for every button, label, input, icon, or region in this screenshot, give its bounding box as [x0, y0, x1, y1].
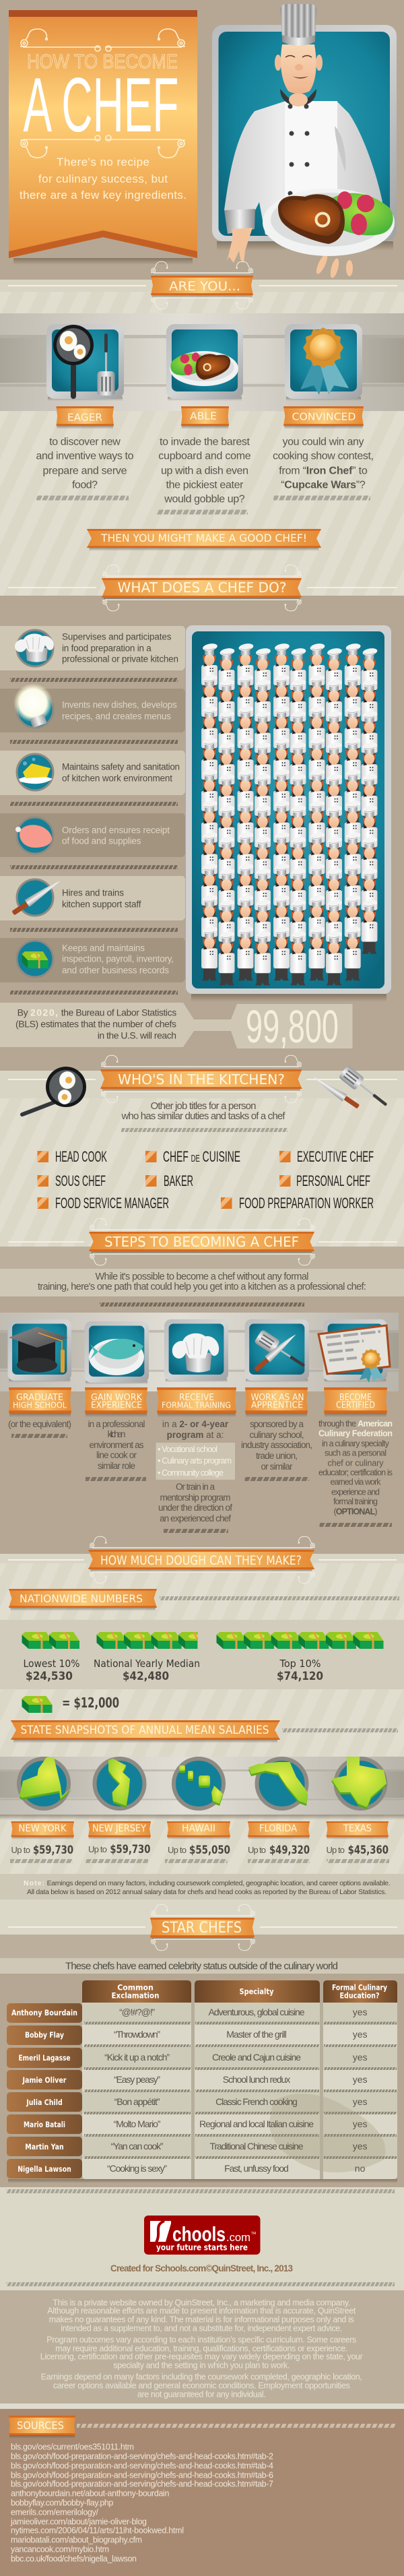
icon: light bulb	[13, 683, 53, 728]
step: become certified: (OPTIONAL)	[334, 1507, 377, 1516]
step: become certified: Culinary Federation	[318, 1428, 393, 1438]
text: eager description: food?	[72, 480, 98, 491]
state: hawaii: Up to	[168, 1845, 187, 1855]
text: disclaimer: are not guaranteed for any individual.	[137, 2389, 266, 2399]
row: supervises: in food preparation in a	[62, 643, 152, 654]
state: florida: Up to	[248, 1845, 266, 1855]
row: safety	[0, 751, 185, 795]
step: graduate high school: HIGH SCHOOL	[13, 1400, 67, 1410]
state: new york: Up to	[11, 1845, 30, 1855]
panel: convinced: CONVINCED	[292, 411, 356, 423]
column: specialty: Master of the grill	[226, 2029, 287, 2040]
text: convinced description	[273, 437, 374, 491]
text: disclaimer: career options available and general economic conditions. Employment opportunities	[53, 2381, 350, 2391]
column: formal culinary education: yes	[353, 2052, 367, 2063]
heading: steps to becoming a chef: STEPS TO BECOMING A CHEF	[104, 1234, 299, 1250]
logo: schools.com: your future starts here	[156, 2242, 248, 2252]
panel: able	[157, 324, 251, 515]
column: formal culinary education: yes	[353, 2141, 367, 2151]
step: receive formal training: an experienced chef	[160, 1513, 231, 1523]
step: gain work experience: kitchen	[108, 1429, 125, 1439]
icon: steak plate	[166, 324, 243, 401]
row: records: and other business records	[62, 966, 169, 976]
row labels: chef names: Nigella Lawson	[18, 2164, 71, 2174]
table header: Common	[117, 1982, 154, 1992]
text: able description: would gobble up?	[164, 494, 245, 505]
heading: how much dough can they make: HOW MUCH DOUGH CAN THEY MAKE?	[100, 1553, 302, 1568]
column: formal culinary education: yes	[353, 2074, 367, 2085]
chart: top 10 percent: Top 10%	[279, 1658, 321, 1670]
chart: lowest 10 percent: $24,530	[26, 1670, 73, 1683]
step: become certified: through the American	[318, 1419, 393, 1428]
state: florida: $49,320	[269, 1844, 310, 1857]
step: work as an apprentice: industry association,	[241, 1440, 312, 1450]
row: records: inspection, payroll, inventory,	[62, 954, 174, 964]
state: new jersey: $59,730	[110, 1843, 151, 1856]
step: work as an apprentice	[241, 1319, 312, 1481]
icon: raw chicken	[15, 817, 53, 854]
ornament: title top flourish	[20, 29, 185, 51]
step: receive formal training: RECEIVE	[179, 1393, 214, 1403]
ornament: title bottom flourish	[20, 135, 185, 158]
subheading: nationwide numbers	[9, 1589, 157, 1611]
column: formal culinary education: yes	[353, 2096, 367, 2107]
list: sources: anthonybourdain.net/about-anthony-bourdain	[11, 2489, 169, 2499]
heading: who's in the kitchen: WHO'S IN THE KITCHEN?	[118, 1071, 285, 1088]
text: disclaimer: Program outcomes vary according to each institution’s specific curriculum. Some careers	[46, 2335, 356, 2345]
intro text: there are a few key ingredients.	[20, 189, 187, 201]
text: star chefs intro: These chefs have earned celebrity status outside of the culinary world	[65, 1961, 338, 1972]
text: eager description: and inventive ways to	[36, 451, 134, 462]
row: supervises: Supervises and participates	[62, 632, 172, 642]
icon: knife	[10, 877, 63, 916]
chart: lowest 10 percent	[22, 1632, 79, 1683]
step: become certified: in a culinary specialty	[322, 1439, 390, 1449]
column: specialty: Creole and Cajun cuisine	[212, 2052, 301, 2063]
text: disclaimer: intended as a supplement to, and not a substitute for, independent expert advice.	[61, 2323, 342, 2333]
column: common exclamation: “Throwdown”	[114, 2029, 160, 2040]
state: texas: $45,360	[348, 1844, 389, 1857]
list: sources: bls.gov/ooh/food-preparation-and-serving/chefs-and-head-cooks.htm#tab-4	[11, 2461, 273, 2470]
icon: spatula and knife crossed	[245, 1319, 309, 1382]
callout: 99,800 chefs by 2020: 99,800	[246, 1001, 339, 1053]
step: work as an apprentice: or similar	[261, 1462, 293, 1472]
heading: what does a chef do: WHAT DOES A CHEF DO?	[117, 579, 287, 596]
text: able description: the pickiest eater	[166, 480, 244, 491]
step: become certified: chef or culinary	[327, 1458, 384, 1468]
state: florida	[248, 1759, 310, 1863]
text: disclaimer: specialty and the setting in which you plan to work.	[113, 2361, 290, 2370]
heading: star chefs	[8, 1904, 397, 1951]
column: specialty: Adventurous, global cuisine	[209, 2007, 305, 2017]
column: formal culinary education: yes	[353, 2029, 367, 2040]
step: become certified: earned via work	[330, 1477, 381, 1486]
row: invents: recipes, and creates menus	[62, 712, 171, 722]
legend: one stack equals 12,000: = $12,000	[62, 1695, 119, 1711]
row: orders	[0, 813, 185, 857]
row: safety: of kitchen work environment	[62, 774, 172, 784]
step: become certified: such as a personal	[325, 1449, 386, 1458]
column: common exclamation: “Bon appétit”	[114, 2096, 160, 2107]
step: graduate high school: GRADUATE	[16, 1393, 63, 1403]
state: hawaii: HAWAII	[182, 1823, 215, 1834]
step: gain work experience: in a professional	[88, 1419, 145, 1429]
step: gain work experience: line cook or	[96, 1450, 137, 1460]
list: sources: nytimes.com/2006/04/11/arts/11iht-bookwed.html	[11, 2525, 184, 2535]
step: receive formal training: program at a:	[167, 1430, 224, 1440]
icon: texas map	[331, 1757, 386, 1809]
subheading: sources	[9, 2416, 75, 2439]
column: formal culinary education: no	[355, 2163, 366, 2174]
step: graduate high school: (or the equivalent)	[8, 1419, 71, 1429]
icon: new york map	[19, 1757, 72, 1809]
banner: then you might make a good chef	[87, 529, 321, 551]
step: become certified: formal training	[333, 1497, 378, 1507]
column: common exclamation: “Cooking is sexy”	[107, 2163, 167, 2174]
list: school types: • Vocational school	[158, 1445, 217, 1454]
panel: convinced	[273, 324, 374, 500]
row: supervises: professional or private kitchen	[62, 654, 178, 664]
list: job titles: FOOD SERVICE MANAGER	[55, 1195, 169, 1212]
state: texas	[326, 1757, 389, 1863]
row: hires: kitchen support staff	[62, 900, 141, 910]
table header: Exclamation	[112, 1990, 159, 2000]
step: become certified	[318, 1319, 393, 1527]
heading: are you: ARE YOU...	[169, 279, 240, 294]
row: orders: Orders and ensures receipt	[62, 825, 170, 836]
intro text	[20, 156, 187, 201]
credit line: Created for Schools.com©QuinStreet, Inc., 2013	[110, 2263, 293, 2273]
chart: national median	[94, 1632, 199, 1682]
text: eager description: prepare and serve	[43, 466, 127, 477]
note: salary data: All data below is based on 2012 annual salary data for chefs and head cooks as reported by the Bureau of Labor Statistics.	[27, 1888, 386, 1896]
subheading: nationwide numbers: NATIONWIDE NUMBERS	[20, 1592, 143, 1605]
callout: 99,800 chefs by 2020: 2020,	[30, 1007, 58, 1018]
text: other job titles intro: Other job titles for a person	[151, 1100, 256, 1112]
row: orders: of food and supplies	[62, 836, 141, 846]
list: sources: yancancook.com/mybio.htm	[11, 2544, 109, 2554]
row: supervises	[0, 626, 185, 670]
text: steps intro: While it's possible to become a chef without any formal	[96, 1271, 308, 1282]
state: texas: Up to	[326, 1845, 345, 1855]
row labels: chef names: Emeril Lagasse	[19, 2053, 71, 2063]
text: disclaimer	[40, 2298, 363, 2399]
column: common exclamation: “Molto Mario”	[114, 2118, 161, 2129]
callout: 99,800 chefs by 2020: By	[18, 1007, 28, 1018]
list: job titles: SOUS CHEF	[55, 1172, 106, 1189]
intro text: for culinary success, but	[38, 172, 168, 185]
text: able description: up with a dish even	[161, 466, 248, 477]
text: convinced description: from “Iron Chef” to	[279, 466, 368, 477]
step: gain work experience: similar role	[98, 1461, 135, 1471]
text: able description: cupboard and come	[158, 451, 251, 462]
logo: schools.com: TM	[251, 2232, 256, 2236]
step: become certified: experience and	[331, 1488, 380, 1497]
list: school types	[156, 1443, 235, 1480]
step: receive formal training: under the direction of	[158, 1503, 232, 1513]
panel: able: ABLE	[190, 410, 217, 422]
text: steps intro	[38, 1271, 366, 1292]
list: sources: bobbyflay.com/bobby-flay.php	[11, 2499, 113, 2508]
step: gain work experience: GAIN WORK	[91, 1393, 142, 1403]
icon: new jersey map	[94, 1759, 144, 1809]
step: graduate high school	[8, 1319, 71, 1438]
chart: top 10 percent: $74,120	[277, 1670, 323, 1683]
intro text: There's no recipe	[57, 156, 149, 168]
heading: are you	[8, 261, 397, 309]
illustration: chef holding a plate	[212, 4, 397, 279]
step: work as an apprentice: sponsored by a	[250, 1419, 304, 1429]
table header	[82, 1980, 397, 2003]
logo: schools.com: chools	[172, 2222, 226, 2246]
note: salary data	[24, 1879, 391, 1896]
column: common exclamation: “Easy peasy”	[114, 2074, 160, 2085]
chart: pictogram of 99 chefs	[186, 625, 391, 1002]
icon: hawaii map	[174, 1759, 224, 1809]
heading: who's in the kitchen	[8, 1055, 397, 1103]
panel: eager: EAGER	[67, 411, 102, 423]
text: able description: to invade the barest	[160, 437, 250, 448]
column: formal culinary education	[353, 2007, 367, 2174]
column: specialty: Traditional Chinese cuisine	[210, 2141, 304, 2151]
callout: 99,800 chefs by 2020: in the U.S. will reach	[98, 1030, 176, 1041]
text: steps intro: training, here's one path that could help you get into a kitchen as a professional chef:	[38, 1282, 366, 1292]
row labels: chef names: Mario Batali	[24, 2120, 65, 2129]
step: receive formal training: Or train in a	[176, 1482, 215, 1492]
panel: title ribbon	[9, 10, 197, 265]
text: disclaimer: Licensing, certification and other pre-requisites may vary widely depending on the state, your	[40, 2352, 363, 2361]
table header: Specialty	[240, 1986, 274, 1996]
icon: toque	[15, 630, 54, 666]
text: convinced description: cooking show contest,	[273, 451, 374, 462]
row: safety: Maintains safety and sanitation	[62, 762, 180, 772]
chart: national median: $42,480	[123, 1670, 169, 1683]
list: sources: bls.gov/ooh/food-preparation-and-serving/chefs-and-head-cooks.htm#tab-7	[11, 2480, 273, 2489]
row: records	[0, 938, 185, 982]
icon: spatula and knife	[311, 1065, 391, 1111]
column: specialty	[199, 2007, 314, 2174]
subheading: sources: SOURCES	[17, 2419, 64, 2432]
heading: what does a chef do	[8, 565, 397, 611]
row: hires: Hires and trains	[62, 888, 124, 898]
text: disclaimer: may require additional education, training, qualifications, certifications or experience.	[55, 2344, 347, 2353]
table: star chefs	[7, 1980, 397, 2183]
logo: schools.com	[144, 2216, 260, 2255]
chart: lowest 10 percent: Lowest 10%	[23, 1658, 79, 1670]
state: hawaii: $55,050	[189, 1844, 230, 1857]
text: other job titles intro: who has similar duties and tasks of a chef	[121, 1110, 285, 1122]
icon: florida map	[248, 1759, 308, 1809]
icon: fish on a plate	[85, 1321, 149, 1384]
step: gain work experience: EXPERIENCE	[91, 1400, 142, 1411]
column: specialty: Regional and local Italian cuisine	[199, 2118, 314, 2129]
row labels: chef names: Anthony Bourdain	[11, 2008, 77, 2017]
step: receive formal training	[156, 1319, 236, 1533]
list: job titles: CHEF DE CUISINE	[163, 1148, 240, 1165]
text: other job titles intro	[121, 1100, 285, 1122]
icon: certificate	[318, 1319, 390, 1383]
row labels: chef names: Jamie Oliver	[22, 2075, 67, 2085]
text: disclaimer: This is a private website owned by QuinStreet, Inc., a marketing and media company.	[53, 2298, 350, 2307]
logo: schools.com: .com	[226, 2231, 250, 2244]
list: sources	[10, 2442, 273, 2563]
callout: 99,800 chefs by 2020	[0, 1001, 353, 1053]
table header: Formal Culinary	[332, 1982, 387, 1992]
step: work as an apprentice: APPRENTICE	[251, 1400, 303, 1411]
column: formal culinary education: yes	[353, 2007, 367, 2017]
row labels: chef names: Julia Child	[26, 2098, 63, 2107]
text: convinced description: “Cupcake Wars”?	[281, 480, 366, 491]
text: disclaimer: Although reasonable efforts are made to present information that is accurate, QuinStreet	[47, 2306, 356, 2315]
list: sources: bls.gov/ooh/food-preparation-and-serving/chefs-and-head-cooks.htm#tab-6	[11, 2470, 273, 2480]
heading: star chefs: STAR CHEFS	[162, 1920, 242, 1937]
icon: cash stack	[17, 941, 53, 977]
row: invents: Invents new dishes, develops	[62, 700, 177, 710]
state: hawaii	[165, 1759, 230, 1863]
step: receive formal training: mentorship program	[160, 1493, 230, 1503]
step: become certified: educator; certification is	[318, 1468, 393, 1477]
row: hires	[0, 876, 185, 920]
list: sources: emerils.com/emerilology/	[11, 2508, 99, 2517]
row: invents	[0, 683, 185, 732]
state: new york: NEW YORK	[19, 1823, 67, 1834]
callout: 99,800 chefs by 2020: the Bureau of Labor Statistics	[61, 1007, 176, 1018]
column: common exclamation: “@!#?@!”	[119, 2007, 155, 2017]
note: salary data: Note:	[24, 1879, 44, 1887]
text: disclaimer: makes no guarantees of any kind. The material is for informational purposes only and is	[49, 2315, 354, 2325]
text: able description	[158, 437, 251, 505]
column: common exclamation: “Yan can cook”	[111, 2141, 164, 2151]
column: common exclamation	[104, 2007, 170, 2174]
column: specialty: Fast, unfussy food	[224, 2163, 289, 2174]
row labels: chef names: Martin Yan	[25, 2142, 64, 2151]
subheading: state snapshots	[11, 1720, 280, 1743]
heading: how much dough can they make	[8, 1536, 397, 1583]
step: work as an apprentice: trade union,	[256, 1451, 298, 1461]
legend: one stack equals 12,000	[22, 1695, 119, 1713]
title line 1: HOW TO BECOME	[27, 51, 178, 73]
step: become certified: CERTIFIED	[336, 1400, 375, 1411]
step: become certified: BECOME	[339, 1393, 372, 1403]
step: work as an apprentice: WORK AS AN	[250, 1393, 304, 1403]
icon: chef's hat	[164, 1319, 228, 1382]
state: new york	[10, 1757, 74, 1863]
list: sources: bls.gov/oes/current/oes351011.htm	[11, 2442, 134, 2451]
list: job titles: BAKER	[164, 1172, 193, 1189]
state: new jersey: NEW JERSEY	[92, 1823, 146, 1834]
icon: frying pan with eggs	[22, 1067, 86, 1114]
chart: national median: National Yearly Median	[94, 1658, 200, 1670]
heading: steps to becoming a chef	[8, 1218, 397, 1265]
state: florida: FLORIDA	[259, 1823, 297, 1834]
column: formal culinary education: yes	[353, 2118, 367, 2129]
column: common exclamation: “Kick it up a notch”	[104, 2052, 170, 2063]
list: sources: jamieoliver.com/about/jamie-oliver-blog	[10, 2517, 147, 2527]
icon: gold medal	[285, 324, 362, 401]
panel: eager	[36, 324, 134, 500]
column: specialty: School lunch redux	[223, 2074, 290, 2085]
step: gain work experience: environment as	[89, 1440, 144, 1450]
chart: top 10 percent	[217, 1632, 384, 1683]
step: work as an apprentice: culinary school,	[249, 1430, 304, 1440]
icon: graduation cap	[8, 1319, 71, 1382]
state: new jersey	[86, 1759, 151, 1863]
step: receive formal training: in a 2- or 4-year	[162, 1419, 229, 1429]
text: eager description: to discover new	[49, 437, 121, 448]
title line 2: A CHEF	[23, 63, 179, 148]
list: sources: bls.gov/ooh/food-preparation-and-serving/chefs-and-head-cooks.htm#tab-2	[11, 2451, 273, 2461]
note: salary data: Earnings depend on many factors, including coursework completed, geographic location, and career options available.	[47, 1879, 391, 1887]
list: sources: mariobatali.com/about_biography.cfm	[11, 2535, 142, 2544]
callout: 99,800 chefs by 2020: (BLS) estimates that the number of chefs	[15, 1019, 176, 1030]
table header: Education?	[339, 1990, 380, 2000]
icon: sponge	[17, 754, 53, 790]
row labels: chef names	[7, 2003, 82, 2178]
list: school types: • Community college	[158, 1468, 224, 1478]
column: specialty: Classic French cooking	[215, 2096, 298, 2107]
text: disclaimer: Earnings depend on many factors including the coursework completed, geographic location,	[41, 2372, 362, 2381]
subheading: state snapshots: STATE SNAPSHOTS OF ANNUAL MEAN SALARIES	[20, 1724, 269, 1737]
text: convinced description: you could win any	[283, 437, 364, 448]
list: sources: bbc.co.uk/food/chefs/nigella_lawson	[11, 2554, 137, 2563]
state: texas: TEXAS	[343, 1823, 372, 1834]
icon: frying pan and spatula	[46, 324, 124, 401]
list: job titles: HEAD COOK	[55, 1148, 107, 1165]
row: records: Keeps and maintains	[62, 943, 145, 953]
state: new jersey: Up to	[88, 1844, 107, 1854]
step: receive formal training: FORMAL TRAINING	[162, 1400, 231, 1410]
list: school types: • Culinary arts program	[158, 1456, 232, 1466]
row labels: chef names: Bobby Flay	[25, 2030, 64, 2040]
state: new york: $59,730	[33, 1844, 73, 1857]
text: eager description	[36, 437, 134, 491]
banner: then you might make a good chef: THEN YOU MIGHT MAKE A GOOD CHEF!	[100, 532, 307, 544]
list: job titles	[38, 1148, 374, 1212]
step: gain work experience	[85, 1321, 149, 1481]
